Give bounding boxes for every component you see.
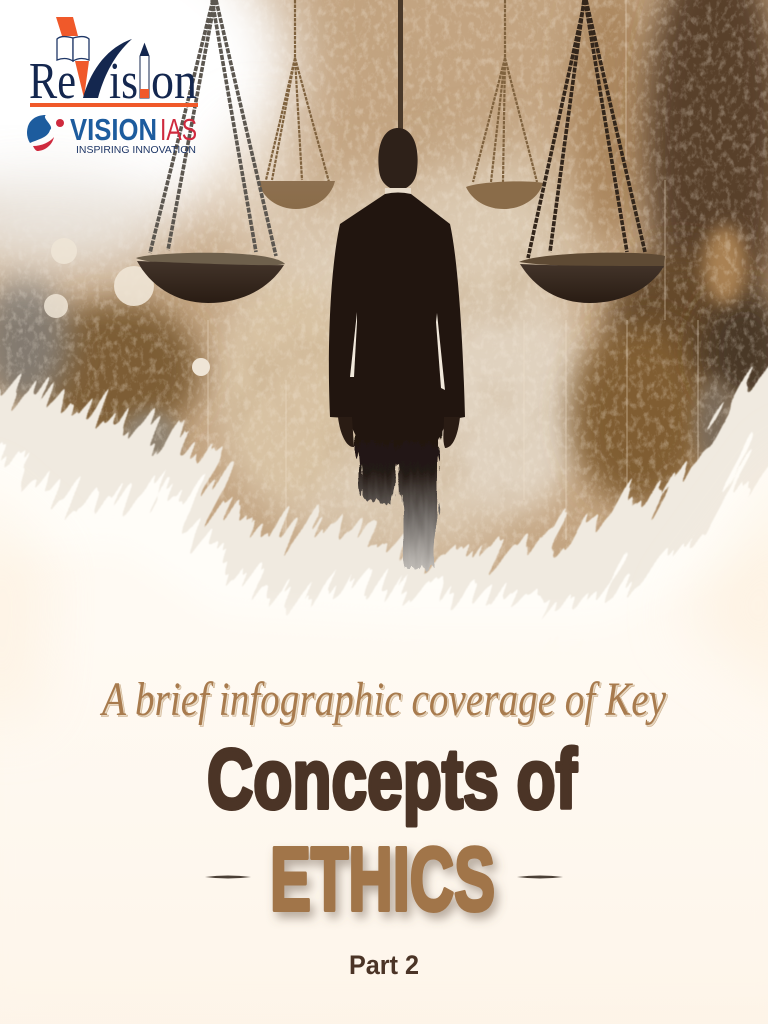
logo: Revision / Vision IAS — [27, 17, 198, 156]
small right scale — [466, 0, 543, 209]
small left scale — [258, 0, 335, 209]
large left scale — [136, 0, 285, 303]
head — [378, 128, 418, 191]
wordmark: IAS: IAS — [160, 112, 197, 147]
dash left — [205, 876, 251, 878]
icon: vision globe — [27, 115, 64, 151]
icon: orange tick stem — [56, 17, 89, 98]
hand right — [443, 417, 460, 448]
icon: open book — [57, 37, 89, 61]
icon: navy tick swoosh — [83, 39, 132, 98]
hands — [338, 417, 354, 447]
fog over top-left — [0, 0, 295, 240]
vertical scratches — [208, 0, 698, 540]
wordmark: is: is — [109, 53, 138, 110]
silhouette of man in suit — [329, 128, 465, 568]
tagline: INSPIRING INNOVATION — [76, 144, 196, 156]
trousers — [355, 405, 441, 568]
heading: ETHICS: ETHICS — [270, 830, 495, 930]
collar — [385, 188, 411, 195]
wordmark: Re: Re — [29, 53, 76, 110]
jacket — [329, 192, 465, 440]
dash right — [517, 876, 563, 878]
bokeh circles — [44, 238, 210, 376]
wordmark: VISION: VISION — [70, 112, 157, 147]
hero artwork: textured backdrop — [0, 0, 768, 600]
icon: pencil — [140, 44, 149, 98]
orange rule — [30, 103, 198, 107]
soft cream wash — [0, 540, 768, 1000]
part label: Part 2 — [349, 950, 419, 980]
hanging rod — [398, 0, 403, 132]
arm gap right — [436, 313, 445, 390]
lower cream tint — [0, 640, 768, 1024]
wordmark: on: on — [151, 53, 197, 110]
large right scale — [519, 0, 665, 303]
heading: Concepts of: Concepts of — [207, 732, 578, 826]
arm gap left — [350, 312, 357, 377]
